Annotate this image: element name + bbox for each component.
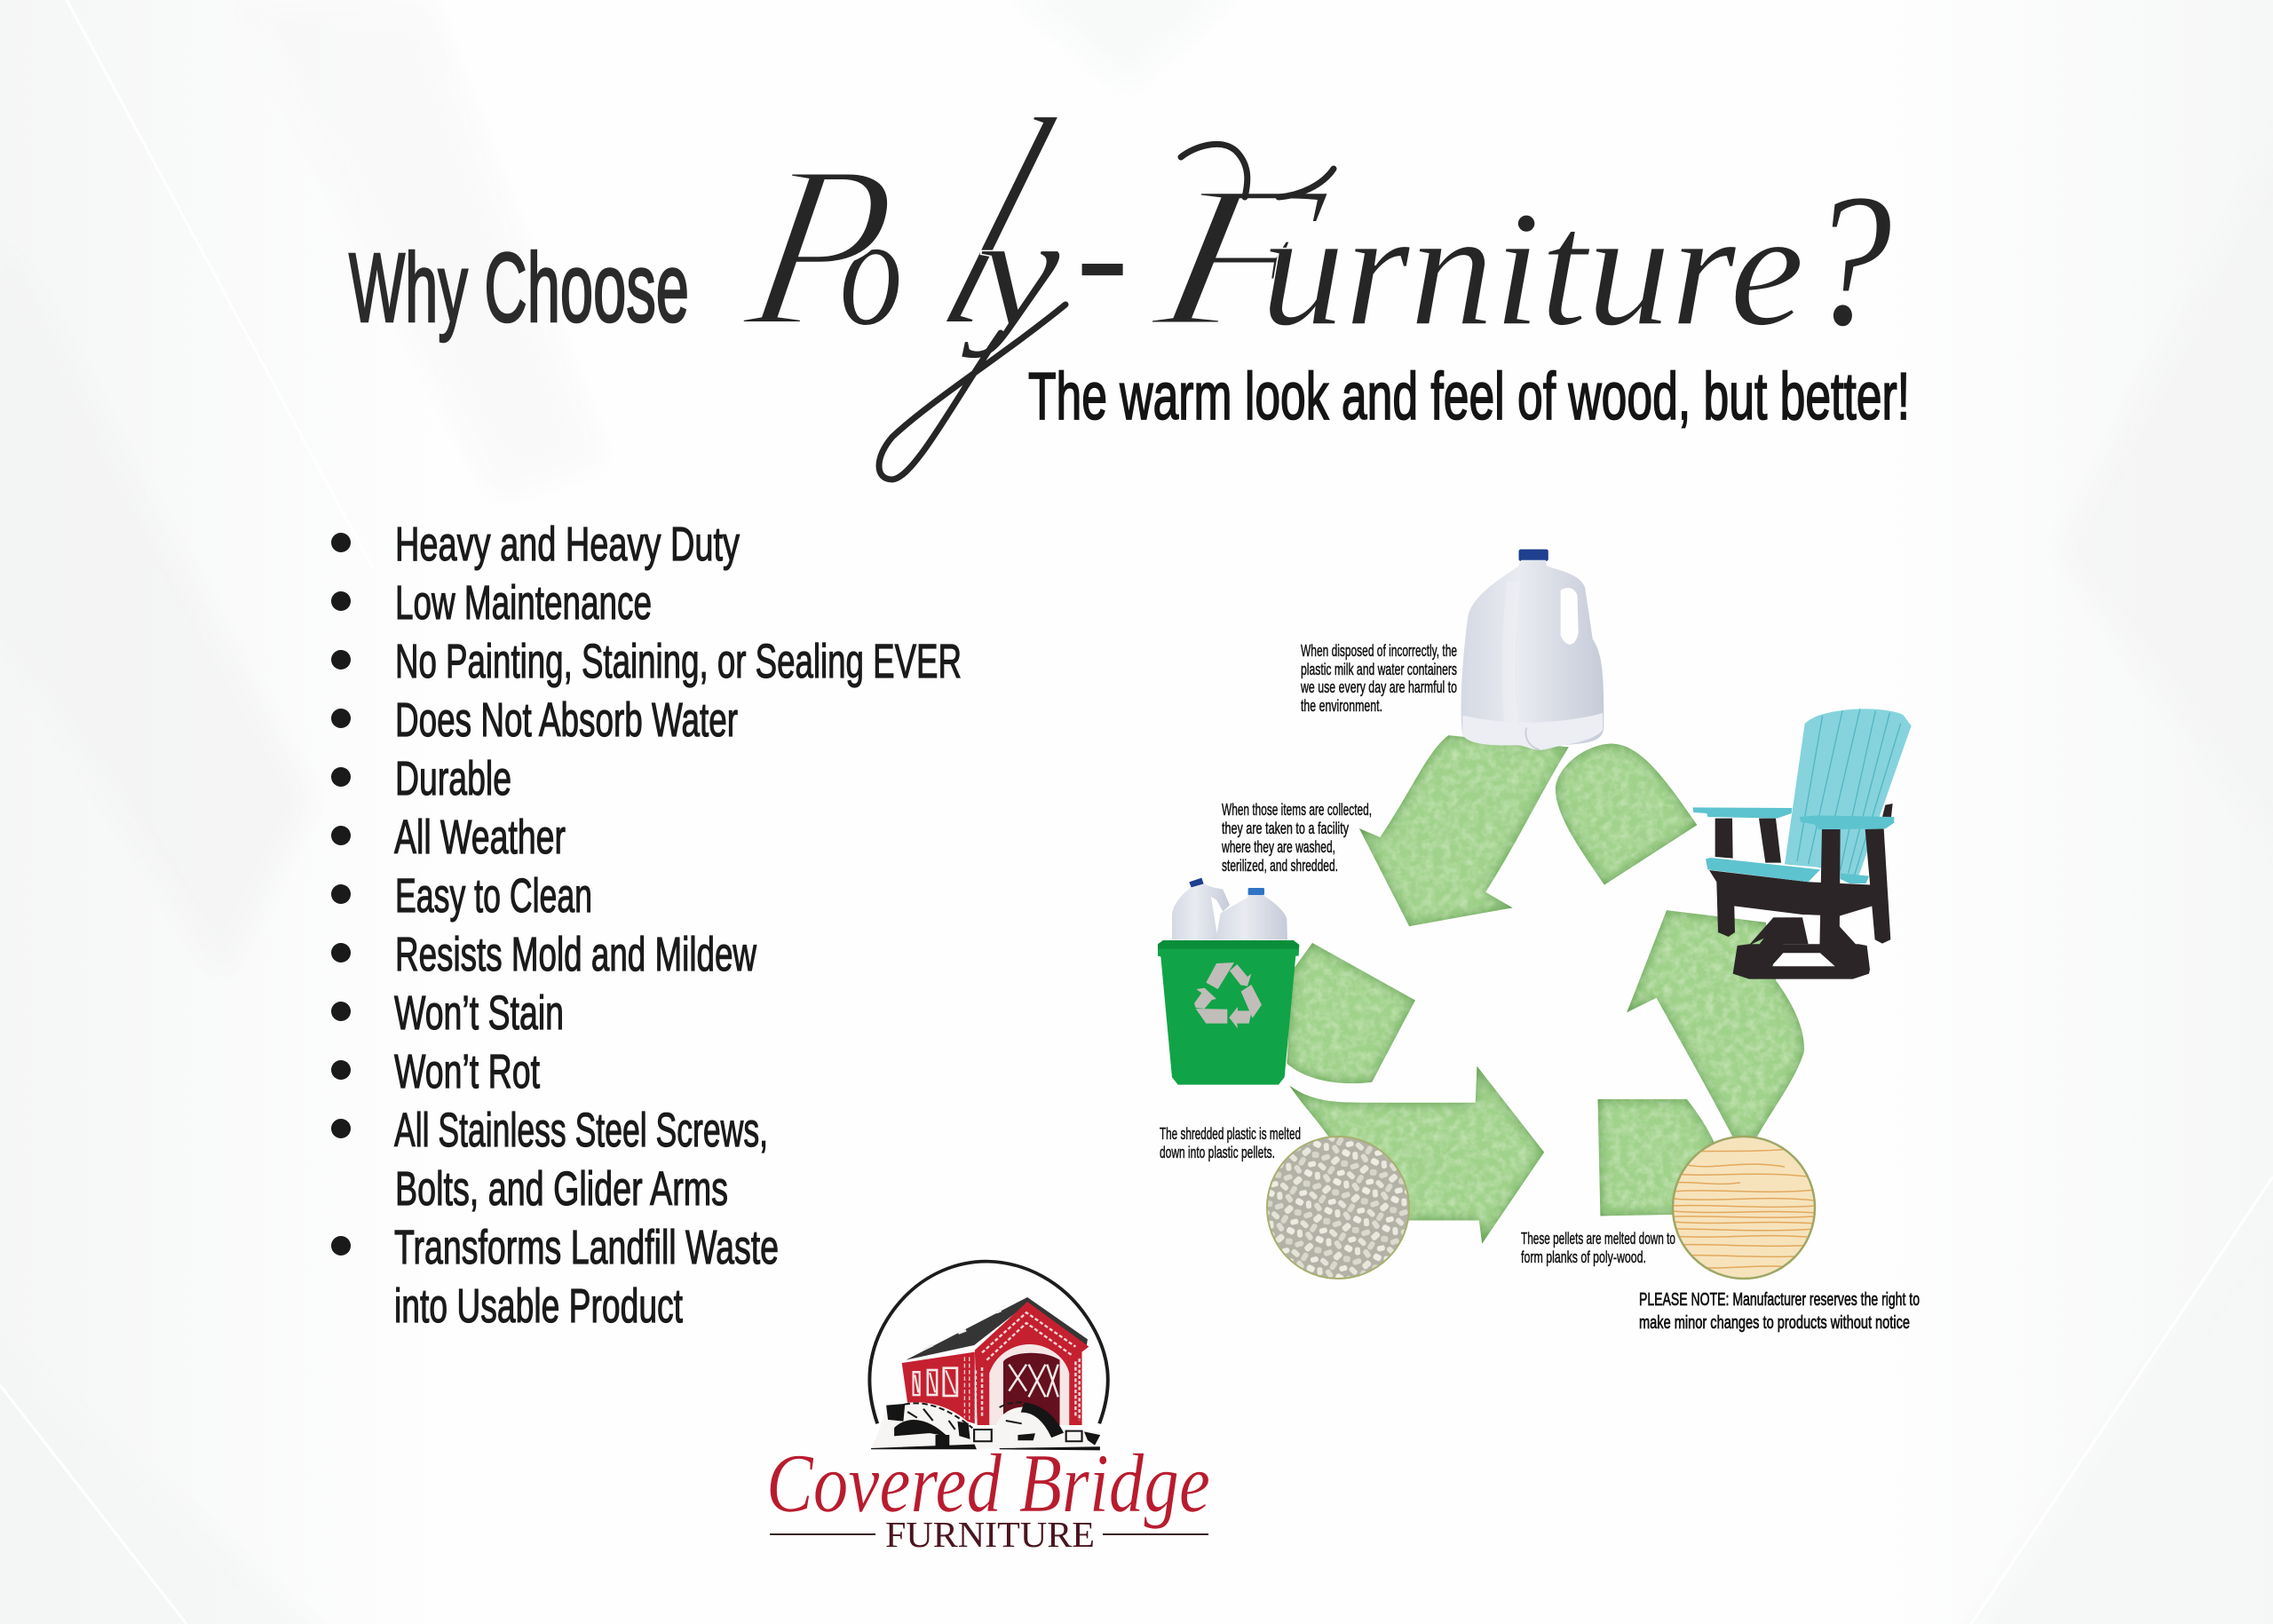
caption: planks: form planks of poly-wood. — [1521, 1248, 1646, 1266]
caption: pellets: The shredded plastic is melted — [1160, 1125, 1301, 1143]
manufacturer note: PLEASE NOTE: Manufacturer reserves the right to — [1639, 1290, 1920, 1310]
benefits list: Resists Mold and Mildew — [395, 928, 757, 981]
icon: recycle symbol — [1194, 963, 1262, 1028]
caption: disposal: the environment. — [1301, 697, 1382, 715]
heading: poly-furniture script: F — [1140, 144, 1340, 368]
caption: disposal: plastic milk and water containers — [1301, 661, 1457, 678]
list bullets — [331, 533, 351, 1256]
heading: poly-furniture script — [729, 56, 1892, 390]
caption: pellets — [1160, 1125, 1301, 1161]
benefits list: Transforms Landfill Waste — [394, 1221, 779, 1274]
chair base and legs — [1709, 828, 1890, 979]
caption: collection: where they are washed, — [1221, 838, 1335, 856]
captions — [1160, 642, 1675, 1266]
icon: poly-wood plank sample — [1673, 1137, 1815, 1279]
icon: plastic pellets — [1267, 1137, 1409, 1279]
benefits list: Heavy and Heavy Duty — [395, 518, 740, 571]
benefits list: into Usable Product — [394, 1279, 683, 1333]
logo: covered bridge furniture — [766, 1262, 1210, 1555]
benefits list: Does Not Absorb Water — [395, 693, 738, 747]
caption: disposal: we use every day are harmful to — [1300, 678, 1457, 696]
benefits list: Won’t Rot — [394, 1045, 540, 1098]
icon: recycling bin with jugs — [1158, 878, 1299, 1085]
caption: collection: When those items are collected, — [1222, 801, 1372, 819]
icon: aqua and black swivel glider chair — [1693, 709, 1912, 979]
logo: bridge emblem — [869, 1262, 1108, 1450]
icon: milk jug — [1461, 550, 1604, 750]
benefits list: All Stainless Steel Screws, — [394, 1104, 768, 1157]
title — [349, 56, 1910, 479]
caption: collection: sterilized, and shredded. — [1222, 857, 1338, 875]
arrow: bottom rightward — [1289, 1066, 1544, 1244]
recycling diagram — [1158, 550, 1912, 1279]
caption: pellets: down into plastic pellets. — [1160, 1144, 1275, 1161]
benefits list — [331, 518, 962, 1333]
benefits list: Easy to Clean — [395, 869, 592, 923]
heading: poly-furniture script: - — [1076, 168, 1129, 341]
arrow: right upward — [1627, 910, 1804, 1139]
title flourishes — [879, 144, 1334, 479]
chair arms and seat — [1693, 807, 1894, 883]
benefits list: Durable — [395, 752, 511, 805]
heading: poly-furniture script: y — [960, 182, 1060, 359]
arrow: left tail piece — [1287, 943, 1415, 1083]
benefits list: All Weather — [394, 811, 566, 864]
arrow: top down-left — [1359, 735, 1569, 926]
arrow: top tail piece — [1556, 743, 1697, 885]
manufacturer note: make minor changes to products without notice — [1639, 1313, 1910, 1333]
caption: collection: they are taken to a facility — [1222, 820, 1349, 837]
subtitle: The warm look and feel of wood, but better! — [1028, 359, 1910, 433]
caption: disposal — [1300, 642, 1457, 715]
caption: disposal: When disposed of incorrectly, the — [1301, 642, 1457, 660]
benefits list: Won’t Stain — [394, 986, 564, 1040]
logo: furniture line: FURNITURE — [885, 1514, 1095, 1555]
heading: poly-furniture script: ? — [1808, 154, 1892, 366]
arrow: bottom right tail piece — [1597, 1099, 1715, 1216]
heading: poly-furniture script: o — [839, 182, 903, 359]
caption: collection — [1221, 801, 1372, 875]
heading: why choose: Why Choose — [349, 234, 689, 343]
heading: poly-furniture script: l — [908, 56, 1087, 390]
benefits list: Bolts, and Glider Arms — [395, 1162, 728, 1216]
heading: poly-furniture script: urniture — [1261, 178, 1804, 360]
chair rear frame — [1715, 804, 1893, 863]
caption: planks: These pellets are melted down to — [1521, 1230, 1675, 1248]
logo: wordmark: Covered Bridge — [766, 1438, 1210, 1530]
benefits list: No Painting, Staining, or Sealing EVER — [395, 635, 962, 688]
heading: poly-furniture script: P — [729, 118, 911, 376]
chair back — [1785, 709, 1912, 876]
recycling arrows — [1287, 735, 1804, 1244]
benefits list: Low Maintenance — [395, 576, 652, 630]
caption: planks — [1521, 1230, 1675, 1266]
manufacturer note — [1639, 1290, 1920, 1333]
